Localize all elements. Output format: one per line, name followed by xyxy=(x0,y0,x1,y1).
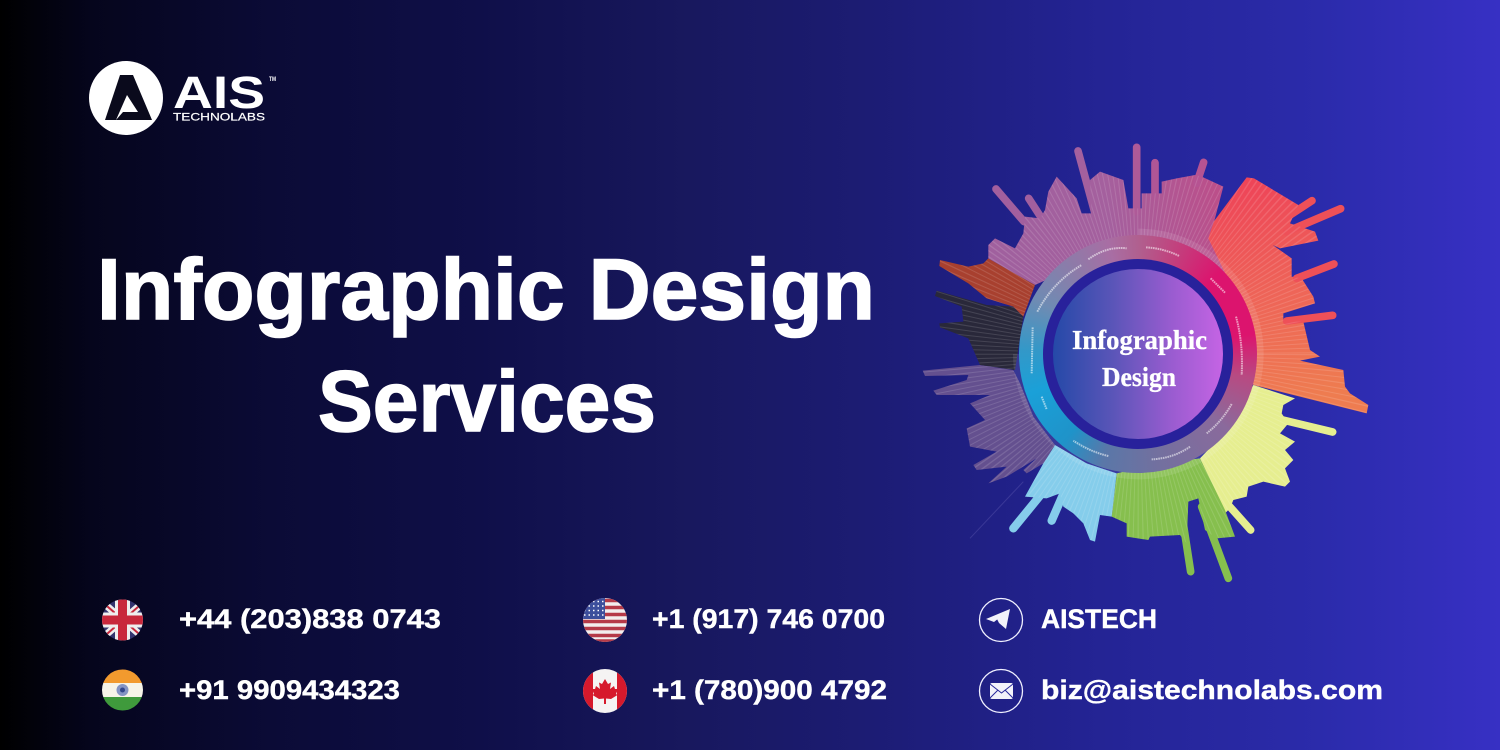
icon: India flag xyxy=(102,670,143,710)
icon: telegram xyxy=(980,598,1022,642)
email address: biz@aistechnolabs.com xyxy=(1041,675,1383,705)
title: Services xyxy=(318,354,656,450)
sector: red orange xyxy=(1200,177,1368,413)
phone number: +44 (203)838 0743 xyxy=(179,604,441,634)
radial infographic illustration xyxy=(922,144,1368,582)
sector: black xyxy=(935,291,1023,370)
sector: light blue xyxy=(1025,445,1117,542)
pale halo around ring xyxy=(1017,232,1260,476)
sector: green xyxy=(1112,458,1235,543)
contact: email xyxy=(978,668,1383,714)
contact: Telegram handle xyxy=(978,598,1157,642)
ring micro labels xyxy=(1030,246,1243,460)
sector: mauve spikes xyxy=(996,147,1204,222)
radial bars xyxy=(922,144,1368,582)
telegram handle text: AISTECH xyxy=(1041,604,1157,634)
contact: US flag and phone xyxy=(583,598,885,642)
phone number: +91 9909434323 xyxy=(179,675,400,705)
sector: mauve and pink xyxy=(988,172,1233,290)
centre label: Design xyxy=(1102,362,1176,392)
logo wordmark: AIS xyxy=(173,67,265,118)
logo mark: white circle with A xyxy=(89,61,163,135)
contact: Canada flag and phone xyxy=(583,669,887,713)
centre label xyxy=(1072,325,1207,392)
central gradient disc xyxy=(1053,269,1223,439)
centre label: Infographic xyxy=(1072,325,1207,355)
faint streak xyxy=(970,482,1023,538)
phone number: +1 (917) 746 0700 xyxy=(652,604,885,634)
contact: UK flag and phone xyxy=(102,600,441,640)
radial bar striping xyxy=(1005,221,1272,487)
phone number: +1 (780)900 4792 xyxy=(652,675,887,705)
sector: green spikes xyxy=(1182,507,1228,578)
contact: India flag and phone xyxy=(102,670,400,710)
logo wordmark xyxy=(173,67,276,124)
icon: US flag xyxy=(582,597,628,643)
sector: yellow spikes xyxy=(1228,419,1333,530)
sector: blue spikes xyxy=(1013,490,1065,528)
title xyxy=(97,242,875,450)
sector: dark red xyxy=(939,258,1035,317)
sector: red spikes xyxy=(1280,201,1341,321)
title: Infographic Design xyxy=(97,242,875,338)
icon: envelope xyxy=(980,670,1022,712)
logo: AIS Technolabs xyxy=(89,61,276,135)
sector: yellow xyxy=(1200,385,1295,513)
icon: Canada flag xyxy=(582,668,628,714)
dark inner ring xyxy=(1043,259,1233,449)
colour ring xyxy=(1019,235,1257,473)
logo wordmark: TECHNOLABS xyxy=(173,112,265,124)
logo wordmark: TM xyxy=(269,77,276,83)
sector: dark purple xyxy=(923,365,1055,483)
icon: UK flag xyxy=(102,600,143,640)
